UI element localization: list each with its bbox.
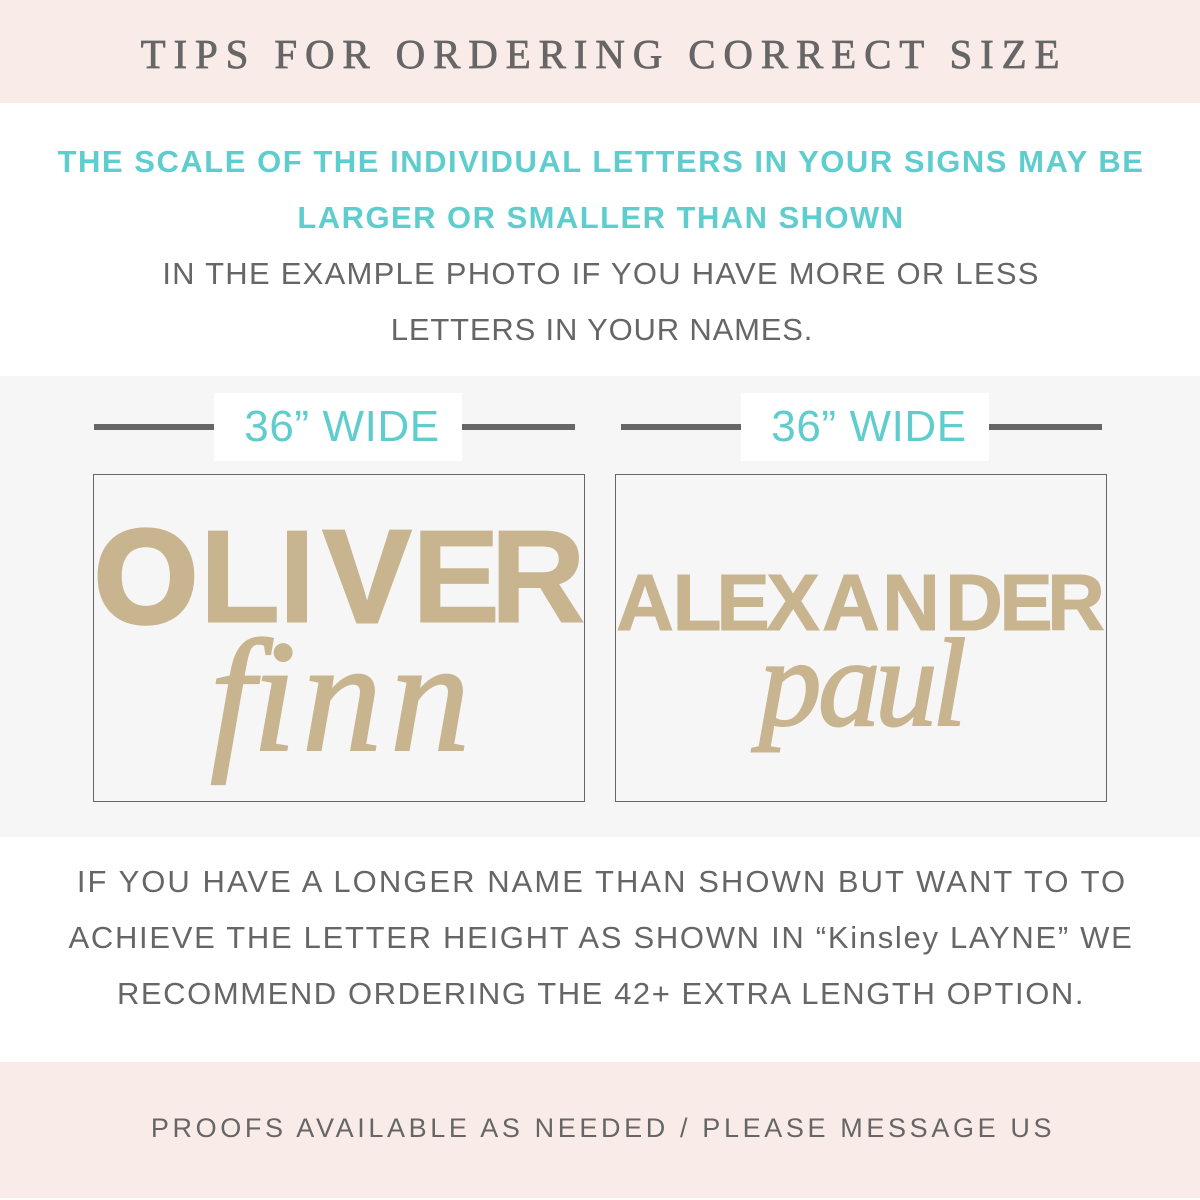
- footer text: PROOFS AVAILABLE AS NEEDED / PLEASE MESSAGE US: [151, 1113, 1055, 1143]
- right width label: 36” WIDE: [771, 402, 967, 451]
- recommendation text block: RECOMMEND ORDERING THE 42+ EXTRA LENGTH OPTION.: [117, 976, 1085, 1011]
- intro text block: LETTERS IN YOUR NAMES.: [391, 312, 813, 347]
- name: OLIVER: O: [95, 503, 197, 650]
- right width rule: [621, 424, 1102, 430]
- name: paul: paul: [751, 615, 967, 753]
- recommendation text block: [68, 864, 1134, 1011]
- name: OLIVER: I: [279, 503, 315, 650]
- name: OLIVER: [95, 503, 586, 650]
- title: TIPS FOR ORDERING CORRECT SIZE: [141, 31, 1067, 77]
- left width label: 36” WIDE: [244, 402, 440, 451]
- footer band: [0, 1062, 1200, 1198]
- intro text block: THE SCALE OF THE INDIVIDUAL LETTERS IN YOUR SIGNS MAY BE: [58, 144, 1144, 179]
- name: OLIVER: V: [323, 503, 411, 650]
- left sign: Oliver finn: [93, 474, 585, 802]
- recommendation text block: IF YOU HAVE A LONGER NAME THAN SHOWN BUT WANT TO TO: [77, 864, 1127, 899]
- name: ALEXANDER: ALEXANDER: [616, 558, 1105, 647]
- intro text block: LARGER OR SMALLER THAN SHOWN: [297, 200, 905, 235]
- recommendation text block: ACHIEVE THE LETTER HEIGHT AS SHOWN IN “Kinsley LAYNE” WE: [68, 920, 1134, 955]
- comparison panel: [0, 376, 1200, 837]
- name: OLIVER: L: [200, 503, 280, 650]
- name: OLIVER: E: [412, 503, 500, 650]
- left width label: [214, 393, 462, 461]
- right width label: [741, 393, 989, 461]
- name: OLIVER: R: [490, 503, 586, 650]
- right sign: Alexander paul: [615, 474, 1107, 802]
- left width rule: [94, 424, 575, 430]
- name: finn: finn: [210, 607, 470, 785]
- header band: [0, 0, 1200, 103]
- intro text block: IN THE EXAMPLE PHOTO IF YOU HAVE MORE OR LESS: [162, 256, 1040, 291]
- intro text block: [58, 144, 1144, 347]
